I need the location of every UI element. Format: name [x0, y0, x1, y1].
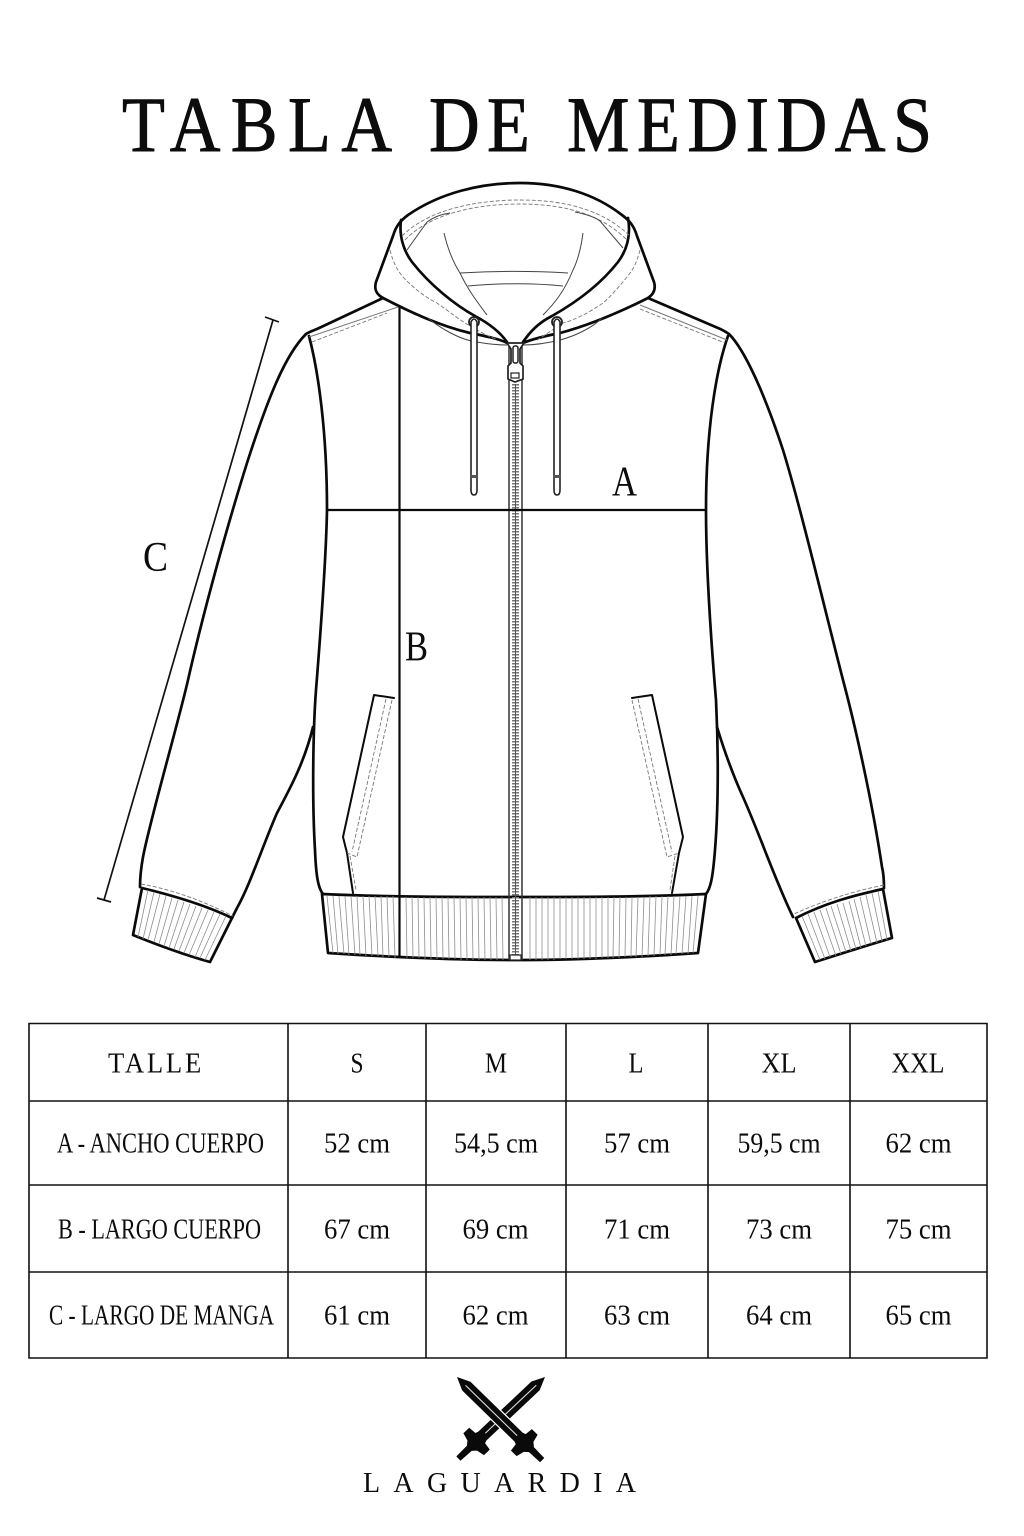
size table [29, 1023, 987, 1358]
measure line C [97, 317, 279, 902]
title [122, 83, 932, 169]
row C: 62 cm [462, 1300, 529, 1332]
header row: TALLE [108, 1048, 204, 1080]
measure line B: B [405, 624, 428, 670]
measure line A: A [612, 460, 638, 506]
hood [375, 183, 655, 345]
right pocket [632, 695, 683, 893]
row B: 73 cm [746, 1214, 812, 1246]
row B: B - LARGO CUERPO [58, 1214, 261, 1246]
row C: C - LARGO DE MANGA [49, 1300, 274, 1332]
row B: 69 cm [462, 1214, 529, 1246]
zipper [507, 343, 524, 960]
header row: S [350, 1048, 364, 1080]
left drawcord [469, 317, 479, 495]
logo: crossed swords [447, 1366, 555, 1471]
row C: 65 cm [886, 1300, 952, 1332]
table grid [29, 1023, 987, 1358]
bottom hem [322, 894, 706, 960]
row A: 52 cm [324, 1128, 390, 1160]
header row: XXL [892, 1048, 944, 1080]
row B: 71 cm [604, 1214, 670, 1246]
jacket technical drawing [133, 183, 892, 962]
header row: M [485, 1048, 507, 1080]
row B [58, 1214, 952, 1246]
row B: 67 cm [324, 1214, 390, 1246]
title: TABLA [122, 83, 392, 169]
row A: 54,5 cm [454, 1128, 538, 1160]
row A: A - ANCHO CUERPO [57, 1128, 264, 1160]
right cuff [794, 885, 892, 962]
title: DE [429, 83, 530, 169]
row C: 63 cm [604, 1300, 670, 1332]
title: MEDIDAS [567, 83, 932, 169]
row A [57, 1128, 952, 1160]
row A: 62 cm [886, 1128, 952, 1160]
measure line C: C [143, 535, 168, 581]
row C: 61 cm [324, 1300, 390, 1332]
row A: 57 cm [604, 1128, 670, 1160]
body and sleeve outlines [140, 298, 884, 918]
row B: 75 cm [886, 1214, 952, 1246]
header row: L [628, 1048, 644, 1080]
header row [108, 1048, 944, 1080]
header row: XL [762, 1048, 796, 1080]
right drawcord [552, 317, 562, 495]
brand name: LAGUARDIA [363, 1468, 637, 1499]
left cuff [133, 884, 233, 962]
row C [49, 1300, 952, 1332]
row C: 64 cm [746, 1300, 812, 1332]
left pocket [343, 695, 394, 893]
row A: 59,5 cm [738, 1128, 821, 1160]
